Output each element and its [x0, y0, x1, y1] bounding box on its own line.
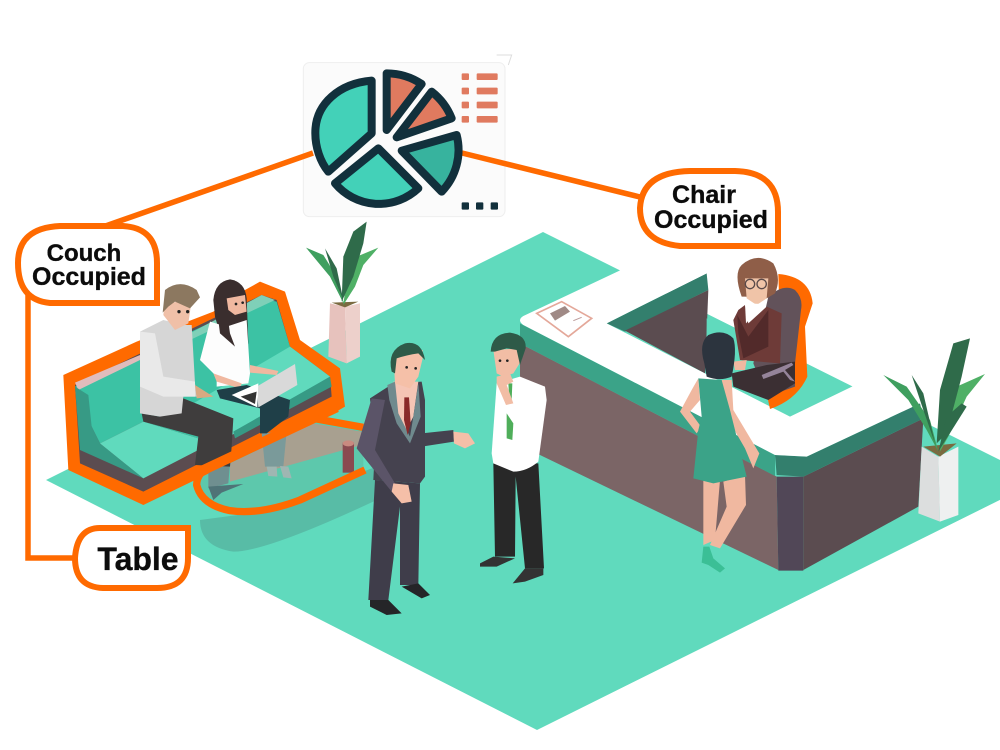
desk right panel [803, 418, 923, 570]
woman legs [703, 475, 746, 548]
receptionist glasses [745, 279, 766, 289]
suit face [393, 350, 423, 388]
suit trousers [368, 480, 420, 600]
orange outline overlays [143, 407, 365, 512]
table with shadow and glass [197, 422, 377, 552]
suit jacket [370, 382, 425, 483]
woman shirt [200, 320, 250, 387]
suit shoes [370, 583, 430, 615]
left plant pot [328, 303, 360, 363]
right plant [883, 338, 985, 522]
pie slice: large left [315, 81, 372, 172]
people on couch [140, 279, 297, 500]
green tie [507, 383, 513, 440]
left plant [306, 222, 378, 363]
suit right arm [422, 430, 454, 447]
label: table [75, 528, 188, 588]
suit lapels [387, 382, 421, 443]
connector lines [28, 153, 640, 558]
woman [200, 279, 297, 433]
suit tie [404, 397, 411, 435]
woman eyes [235, 301, 244, 305]
pie slice: upper right [397, 92, 452, 137]
couch back highlight [190, 295, 275, 340]
woman shoes [267, 466, 292, 478]
middle seat strip [198, 420, 235, 452]
woman lower legs [262, 432, 287, 467]
label: chair occupied: Chair [672, 181, 736, 209]
laptop [232, 364, 297, 407]
desk top [520, 250, 930, 457]
white shirt shoes [480, 557, 543, 583]
desk floor notch [707, 318, 847, 417]
right plant leaves [883, 338, 985, 452]
desk front band [520, 323, 775, 476]
floor [46, 232, 1000, 730]
right seat [193, 347, 330, 432]
receptionist hand [733, 360, 747, 370]
couch arm [75, 387, 143, 478]
receptionist hair [737, 258, 778, 298]
label: couch occupied: Occupied [32, 263, 146, 291]
legend list [462, 73, 498, 123]
man [140, 284, 233, 467]
man arm [140, 332, 195, 397]
receptionist jacket shade [737, 310, 768, 358]
white shirt arm and hand [497, 373, 513, 405]
desk front panel [520, 343, 778, 570]
white shirt trousers [493, 463, 544, 568]
desk right band [775, 403, 923, 477]
table far side [230, 423, 362, 482]
receptionist jacket [733, 305, 782, 363]
right plant soil [923, 443, 957, 457]
white shirt hair [491, 333, 526, 365]
table leg [343, 440, 354, 473]
couch orange outline [63, 282, 345, 505]
woman hair [702, 332, 735, 379]
woman hair back [213, 279, 248, 350]
chair orange outline [767, 274, 813, 409]
desk recess wall [625, 290, 708, 373]
suit hands [392, 432, 475, 503]
white shirt eyes [499, 359, 509, 362]
suit shirt [393, 382, 418, 433]
table shadow [200, 467, 377, 552]
chair arm [762, 363, 795, 382]
receptionist collar [745, 303, 763, 323]
white shirt face [493, 348, 522, 377]
woman in green dress [680, 332, 759, 573]
couch back top edge [75, 355, 140, 390]
label: chair occupied [640, 171, 778, 246]
man in suit [357, 343, 475, 615]
couch back [75, 298, 330, 443]
man lower leg and shoe [208, 463, 243, 500]
man eyes [177, 310, 189, 313]
man sweater [140, 320, 197, 417]
desk recess band [607, 273, 708, 332]
pie slice: bottom [335, 148, 418, 204]
right seat front [233, 377, 332, 438]
desk corner panel [777, 477, 803, 571]
left plant leaves [306, 222, 378, 305]
left seat [100, 422, 198, 478]
receptionist [732, 258, 795, 400]
man in white shirt [480, 333, 547, 583]
man hand [195, 385, 213, 398]
pie slice: right [402, 135, 459, 192]
left plant soil [332, 302, 358, 307]
woman arms [680, 378, 759, 468]
pie slice: top [387, 73, 422, 130]
clipboard [537, 302, 592, 337]
woman lap [217, 385, 290, 433]
woman shoes [702, 547, 725, 573]
suit hair [391, 343, 425, 373]
woman face [227, 295, 247, 315]
right plant pot [918, 447, 958, 522]
label: couch occupied: Couch [47, 240, 121, 267]
woman hair strand [217, 307, 235, 347]
man face [163, 300, 192, 330]
table glass top [197, 422, 363, 512]
more dots [462, 202, 498, 210]
woman dress [693, 378, 747, 483]
couch body [75, 295, 332, 492]
reception desk [520, 250, 930, 573]
label: chair occupied: Occupied [654, 206, 768, 234]
suit eyes [405, 366, 417, 370]
label: table: Table [97, 541, 179, 577]
couch with orange outline [63, 282, 345, 505]
woman arms [213, 365, 278, 388]
pie chart [315, 73, 459, 204]
label: couch occupied [18, 226, 157, 303]
man trousers [142, 398, 233, 467]
standing men [357, 333, 547, 615]
dashboard card background [303, 55, 512, 217]
chair [753, 288, 802, 397]
receptionist skirt [732, 362, 795, 400]
pie chart and legend [315, 73, 498, 210]
white shirt body [492, 377, 547, 472]
receptionist face [745, 278, 768, 305]
man hair [163, 284, 200, 313]
suit sleeve [357, 398, 395, 492]
